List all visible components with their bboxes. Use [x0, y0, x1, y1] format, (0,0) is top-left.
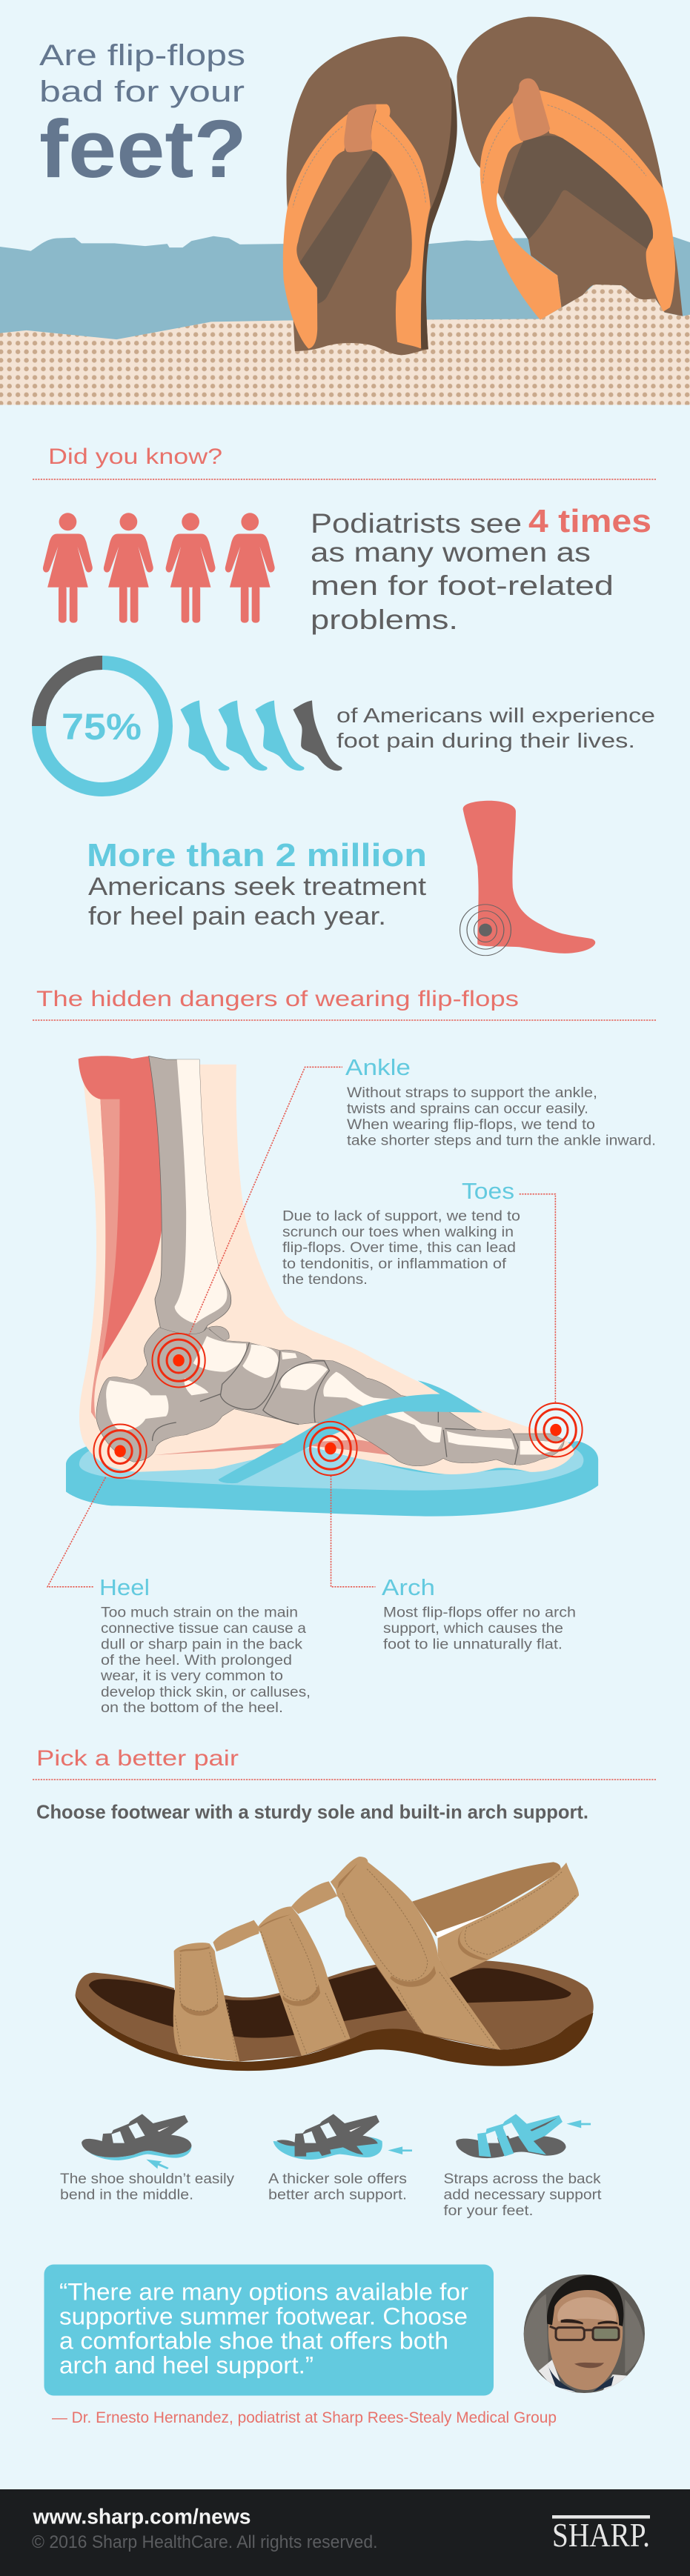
stat: 4 times as many women: Podiatrists see [311, 508, 522, 539]
callout: toes: Due to lack of support, we tend to [282, 1209, 520, 1224]
left flip-flop [283, 36, 457, 355]
calf muscle [79, 1056, 162, 1420]
title [39, 39, 247, 195]
callout: toes: flip-flops. Over time, this can lead [282, 1240, 516, 1256]
footer [0, 2489, 690, 2576]
icon: sandal with cyan straps [456, 2114, 591, 2158]
quote box: arch and heel support.” [59, 2352, 314, 2379]
logo: Sharp: SHARP. [552, 2516, 650, 2554]
foot, muscle and leg bones [79, 1056, 574, 1474]
heading: did you know: Did you know? [48, 445, 222, 469]
callout: toes [282, 1178, 520, 1288]
icon: heel pain foot [460, 801, 595, 956]
title: Are flip-flops [39, 39, 245, 72]
tip 1: shoe should not bend: bend in the middle. [60, 2187, 193, 2203]
callout: heel: dull or sharp pain in the back [101, 1637, 303, 1652]
foot flesh [79, 1065, 574, 1474]
tip 2: thicker sole: A thicker sole offers [268, 2171, 407, 2187]
leg bones [149, 1056, 231, 1337]
stat: 4 times as many women: problems. [311, 605, 458, 635]
stat: 4 times as many women [311, 503, 651, 635]
quote box: “There are many options available for [59, 2278, 468, 2305]
donut chart: 75 percent [39, 662, 166, 790]
callout: ankle: Without straps to support the ankle, [347, 1085, 597, 1101]
leader lines [47, 1067, 555, 1587]
callout: arch [382, 1574, 576, 1652]
callout: arch: Arch [382, 1574, 435, 1600]
callout: toes: to tendonitis, or inflammation of [282, 1257, 507, 1272]
flip-flops [283, 17, 683, 355]
title: bad for your [39, 76, 245, 108]
callout: heel [99, 1574, 311, 1716]
sand [0, 284, 690, 405]
stat: 4 times as many women: 4 times [528, 503, 651, 539]
callout: toes: scrunch our toes when walking in [282, 1225, 514, 1240]
title: feet? [39, 104, 247, 195]
footer: © 2016 Sharp HealthCare. All rights reserved. [32, 2532, 378, 2552]
callout: toes: Toes [462, 1178, 514, 1204]
tip 3: back straps: Straps across the back [443, 2171, 601, 2187]
callout: arch: support, which causes the [383, 1621, 563, 1637]
attribution: — Dr. Ernesto Hernandez, podiatrist at Sharp Rees-Stealy Medical Group [52, 2409, 557, 2426]
callout: heel: develop thick skin, or calluses, [101, 1685, 311, 1700]
tip 1: shoe should not bend: The shoe shouldn’t easily [60, 2171, 235, 2187]
pain target: heel [93, 1424, 147, 1478]
callout: ankle [345, 1054, 656, 1148]
callout: heel: wear, it is very common to [100, 1668, 283, 1684]
stat: foot pain: foot pain during their lives. [336, 729, 635, 752]
flip-flop strap [219, 1380, 482, 1483]
callout: ankle: twists and sprains can occur easily. [347, 1101, 588, 1117]
tip 3: back straps [443, 2114, 602, 2219]
sandal illustration [75, 1857, 594, 2071]
callout: heel: on the bottom of the heel. [101, 1700, 283, 1716]
callout: heel: Too much strain on the main [101, 1605, 298, 1621]
tip 3: back straps: for your feet. [443, 2203, 534, 2219]
foot anatomy diagram [47, 1056, 598, 1587]
stat: more than 2 million: Americans seek treatment [88, 873, 427, 901]
tip 2: thicker sole: better arch support. [268, 2187, 407, 2203]
foot bones [96, 1326, 564, 1466]
callout: heel: connective tissue can cause a [101, 1621, 306, 1637]
footer: www.sharp.com/news [33, 2506, 251, 2529]
hero illustration: beach background [0, 236, 690, 405]
flip-flop sole [66, 1441, 598, 1517]
quote box: supportive summer footwear. Choose [59, 2303, 468, 2330]
callout: ankle: Ankle [345, 1054, 411, 1080]
pain target: toes [529, 1403, 583, 1457]
stat: more than 2 million: More than 2 million [87, 837, 427, 873]
donut chart: 75 percent: 75% [62, 706, 142, 748]
callout: toes: the tendons. [282, 1272, 368, 1288]
icon row: four feet [180, 700, 342, 771]
right flip-flop [457, 17, 683, 320]
tip 2: thicker sole [268, 2114, 412, 2203]
icon: sandal with thick sole arrow [273, 2114, 412, 2160]
quote box [44, 2264, 494, 2396]
stat: foot pain [336, 704, 655, 752]
pain target: arch [304, 1422, 357, 1475]
heading: hidden dangers: The hidden dangers of wearing flip-flops [36, 987, 519, 1011]
water band [0, 236, 690, 343]
icon row: four women [43, 513, 275, 623]
stat: 4 times as many women: as many women as [311, 537, 591, 568]
callout: heel: Heel [99, 1574, 150, 1600]
tip 3: back straps: add necessary support [443, 2187, 602, 2203]
portrait of doctor [523, 2274, 645, 2393]
subheading: Choose footwear with a sturdy sole and built-in arch support. [36, 1800, 588, 1823]
leader lines and pain targets [47, 1067, 583, 1587]
callout: arch: Most flip-flops offer no arch [383, 1605, 576, 1621]
stat: more than 2 million: for heel pain each year. [88, 902, 386, 931]
pain target: ankle [152, 1334, 205, 1387]
heading: pick a better pair: Pick a better pair [36, 1746, 239, 1771]
icon: sandal with bend arrow [82, 2114, 191, 2169]
callout: ankle: take shorter steps and turn the ankle inward. [347, 1133, 656, 1148]
stat: foot pain: of Americans will experience [336, 704, 655, 727]
quote box: a comfortable shoe that offers both [59, 2328, 448, 2354]
callout: heel: of the heel. With prolonged [101, 1653, 292, 1668]
callout: arch: foot to lie unnaturally flat. [383, 1637, 563, 1652]
stat: more than 2 million [87, 837, 427, 931]
stat: 4 times as many women: men for foot-related [311, 570, 614, 601]
tip 1: shoe should not bend [60, 2114, 235, 2203]
callout: ankle: When wearing flip-flops, we tend to [347, 1117, 595, 1133]
